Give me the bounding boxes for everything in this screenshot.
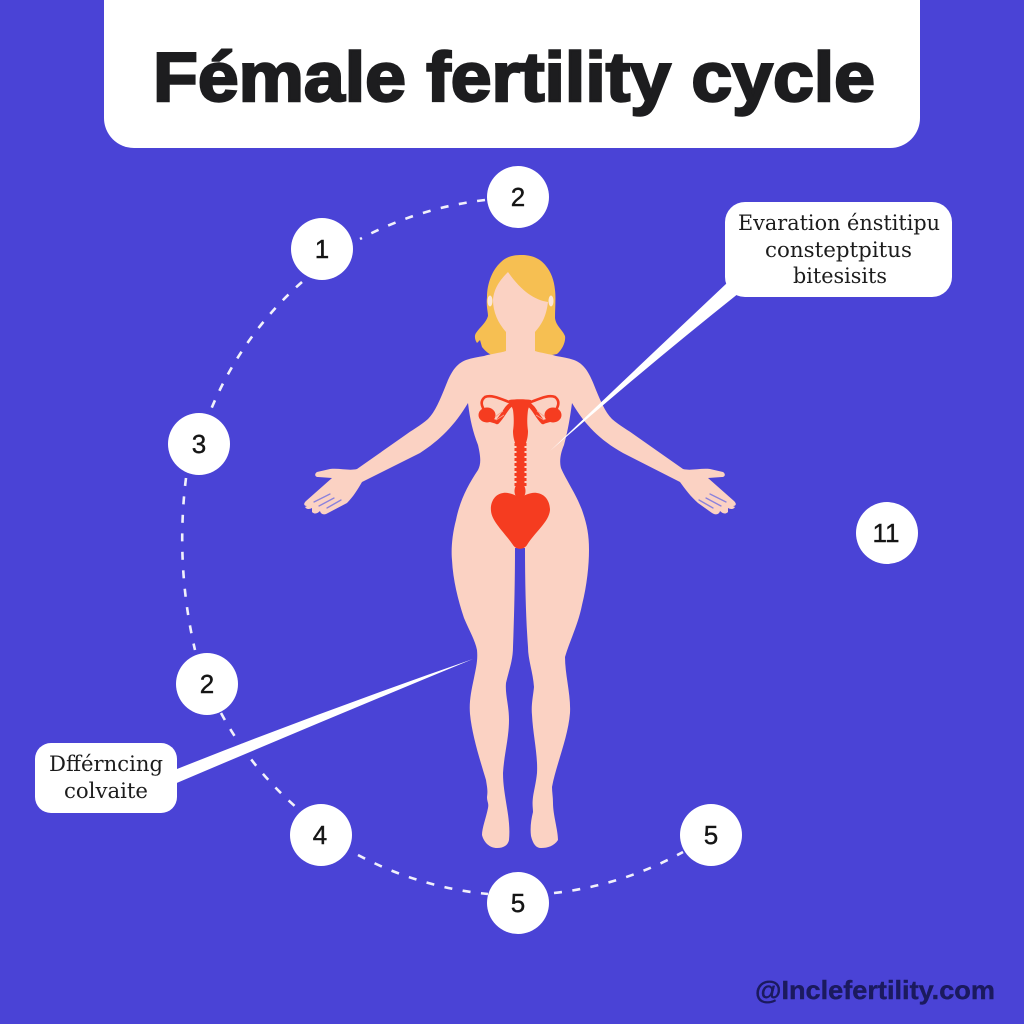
cycle step 2 left: [176, 653, 238, 715]
callout text: consteptpitus: [765, 238, 912, 262]
finger gaps: [314, 494, 726, 508]
title banner: [104, 0, 920, 148]
pointer: [550, 283, 739, 451]
cycle step 4: [290, 804, 352, 866]
fallopian tubes: [482, 396, 558, 422]
callout: upper right: [550, 202, 952, 451]
cycle step 2 top: 2: [511, 182, 525, 212]
reproductive organs: [478, 396, 562, 549]
cycle step 3: 3: [192, 429, 206, 459]
lower bulb: [514, 483, 526, 499]
callout text: bitesisits: [793, 264, 887, 288]
callout text: Evaration énstitipu: [738, 211, 940, 235]
title: Fémale fertility cycle: [153, 38, 875, 116]
callout text: Dfférncing: [49, 752, 163, 776]
cycle step 3: [168, 413, 230, 475]
callout text: colvaite: [64, 779, 148, 803]
callout text: [738, 211, 940, 288]
cycle step 2 left: 2: [200, 669, 214, 699]
callout: lower left: [35, 659, 473, 813]
cycle step 5 right: [680, 804, 742, 866]
ovaries: [478, 408, 562, 422]
pointer: [172, 659, 473, 785]
ridged canal: [516, 442, 524, 486]
cycle step 5 bottom: [487, 872, 549, 934]
cycle step 11: 11: [872, 518, 900, 548]
ears: [488, 296, 554, 306]
footer handle: @Inclefertility.com: [755, 975, 995, 1005]
female figure: [304, 255, 736, 848]
cycle step 11: [856, 502, 918, 564]
cycle step 1: 1: [315, 234, 329, 264]
heart shape organ: [491, 493, 550, 549]
cycle step 4: 4: [313, 820, 327, 850]
fimbriae: [495, 411, 545, 420]
cycle step 5 right: 5: [704, 820, 718, 850]
hair: [475, 255, 565, 356]
cycle step 2 top: [487, 166, 549, 228]
callout text: [49, 752, 163, 803]
dashed cycle ring: [182, 200, 683, 894]
cycle step 5 bottom: 5: [511, 888, 525, 918]
body silhouette: [304, 272, 736, 848]
cycle step 1: [291, 218, 353, 280]
uterus: [509, 399, 531, 445]
